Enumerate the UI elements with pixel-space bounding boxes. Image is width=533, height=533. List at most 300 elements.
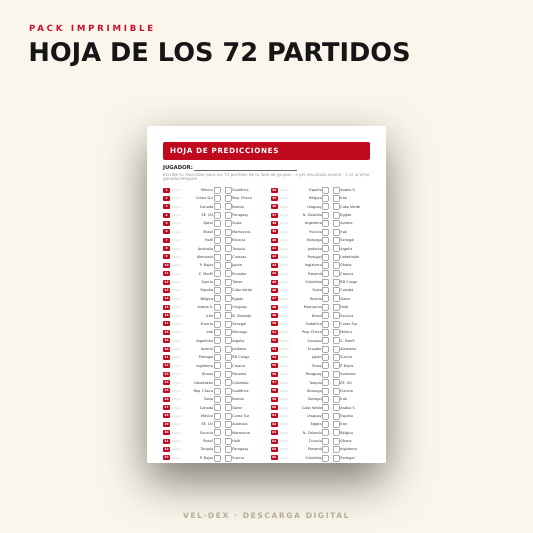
match 33 <box>163 455 244 462</box>
match 16: N. Zelanda <box>232 314 251 318</box>
match 6: - <box>222 230 223 234</box>
match 35: 35 <box>272 196 276 200</box>
match 11: 14 jun <box>172 272 181 276</box>
match 44: 22 jun <box>280 272 289 276</box>
match 31: Brasil <box>203 439 213 443</box>
match 17 <box>163 321 246 328</box>
match 21: 17 jun <box>172 355 181 359</box>
match 38 <box>147 219 386 227</box>
match 29: - <box>222 422 223 426</box>
match 20: Austria <box>201 347 213 351</box>
match 19: Argelia <box>232 339 244 343</box>
match 14: - <box>222 297 223 301</box>
match 53: Alemania <box>340 347 356 351</box>
match 36: 36 <box>272 204 276 208</box>
match 13: - <box>222 288 223 292</box>
match 4: Paraguay <box>232 213 248 217</box>
match 28: - <box>222 414 223 418</box>
match 45: - <box>330 280 331 284</box>
match 55: - <box>330 364 331 368</box>
match 3: Bosnia <box>232 205 244 209</box>
match 14: Egipto <box>232 297 243 301</box>
match 51: Rep. Checa <box>302 330 322 334</box>
match 8: 8 <box>165 246 168 250</box>
match 9: 14 jun <box>172 255 181 259</box>
match 56: 56 <box>272 372 276 376</box>
match 1: - <box>222 188 223 192</box>
match 8: 13 jun <box>172 247 181 251</box>
match 12: 14 jun <box>172 280 181 284</box>
match 54: Japón <box>312 355 322 359</box>
match 62: 62 <box>272 422 276 426</box>
match 1: México <box>201 188 213 192</box>
match 55: 25 jun <box>280 364 289 368</box>
match 53: - <box>330 347 331 351</box>
match 8: Australia <box>198 247 213 251</box>
match 5: 5 <box>165 221 168 225</box>
match 15: Arabia S. <box>198 305 213 309</box>
match 30: 30 <box>164 430 169 434</box>
match 39: Francia <box>309 230 322 234</box>
match 60: Arabia S. <box>340 406 356 410</box>
match 38: Argentina <box>305 221 322 225</box>
match 13: España <box>200 288 213 292</box>
match 45: 23 jun <box>280 280 289 284</box>
match 53: Ecuador <box>308 347 322 351</box>
match 27: Qatar <box>232 406 242 410</box>
match 12: 12 <box>164 280 169 284</box>
match 33: - <box>222 456 223 460</box>
match 41: 41 <box>272 246 276 250</box>
match 18: Irak <box>206 330 213 334</box>
match 60: 26 jun <box>280 406 289 410</box>
match 14: 15 jun <box>172 297 181 301</box>
match 17: Senegal <box>232 322 246 326</box>
match 26: Bosnia <box>232 397 244 401</box>
match 48: Marruecos <box>304 305 322 309</box>
match 7: Haití <box>205 238 213 242</box>
match 34: 34 <box>272 188 276 192</box>
match 43: Ghana <box>340 263 352 267</box>
match 39: 39 <box>272 229 276 233</box>
match 61: 61 <box>272 413 276 417</box>
match 25: Rep. Checa <box>194 389 213 393</box>
match 26: 26 <box>164 397 169 401</box>
match 14 <box>163 295 244 302</box>
match 1: 11 jun <box>172 188 181 192</box>
match 11: C. Marfil <box>199 272 213 276</box>
match 15: 15 jun <box>172 305 181 309</box>
match 64: 27 jun <box>280 439 289 443</box>
match 42: - <box>330 255 331 259</box>
match 16: Irán <box>206 314 213 318</box>
match 51: México <box>340 330 352 334</box>
match 22: 22 <box>164 363 169 367</box>
match 50: 24 jun <box>280 322 289 326</box>
match 34: - <box>330 188 331 192</box>
match 27: - <box>222 406 223 410</box>
match 15: 15 <box>164 305 169 309</box>
match 46: Suiza <box>312 288 322 292</box>
match 47: Bosnia <box>310 297 322 301</box>
match 14: 14 <box>164 296 169 300</box>
match 16 <box>163 312 251 318</box>
match 40: 40 <box>272 238 276 242</box>
match 66: 27 jun <box>280 456 289 460</box>
match 50: Corea Sur <box>340 322 357 326</box>
match 35: Irán <box>340 196 347 200</box>
left match column <box>163 187 252 462</box>
match 36: Cabo Verde <box>340 205 360 209</box>
match 29: 29 <box>164 422 169 426</box>
match 47: 47 <box>272 296 276 300</box>
match 27: 18 jun <box>172 406 181 410</box>
match 5 <box>163 220 242 226</box>
match 59: - <box>330 397 331 401</box>
match 22: - <box>222 364 223 368</box>
match 26: 18 jun <box>172 397 181 401</box>
match 55: P. Bajos <box>340 364 353 368</box>
match 52: 52 <box>272 338 276 342</box>
match 40: Senegal <box>340 238 354 242</box>
match 59 <box>147 395 386 403</box>
match 47 <box>147 295 386 303</box>
match 11: 11 <box>164 271 169 275</box>
match 21: Portugal <box>199 355 213 359</box>
match 30: Marruecos <box>232 431 250 435</box>
match 58: Francia <box>340 389 353 393</box>
match 37 <box>271 212 352 218</box>
match 48: Haití <box>340 305 348 309</box>
match 46: - <box>330 288 331 292</box>
match 62 <box>147 420 386 428</box>
match 32: 32 <box>164 447 169 451</box>
match 47: Qatar <box>340 297 350 301</box>
match 46: 46 <box>272 288 276 292</box>
match 43: 43 <box>272 263 276 267</box>
match 23 <box>163 371 246 378</box>
match 32: Turquía <box>200 447 213 451</box>
match 34: España <box>309 188 322 192</box>
match 50: 50 <box>272 321 276 325</box>
match 59: Senegal <box>308 397 322 401</box>
match 24 <box>163 379 248 386</box>
match 41 <box>147 245 386 253</box>
match 17: 16 jun <box>172 322 181 326</box>
match 56: Paraguay <box>306 372 322 376</box>
match 45: 45 <box>272 280 276 284</box>
match 65 <box>147 445 386 453</box>
match 66: - <box>330 456 331 460</box>
match 18 <box>163 329 247 336</box>
match 28: 18 jun <box>172 414 181 418</box>
match 16: 16 <box>164 313 169 317</box>
match 31: - <box>222 439 223 443</box>
match 17: - <box>222 322 223 326</box>
match 54: 25 jun <box>280 355 289 359</box>
match 57: 57 <box>272 380 276 384</box>
match 23: 23 <box>164 372 169 376</box>
match 43: 22 jun <box>280 263 289 267</box>
match 65: 27 jun <box>280 447 289 451</box>
match 29: 19 jun <box>172 422 181 426</box>
match 52: Curazao <box>308 339 322 343</box>
match 5: - <box>222 221 223 225</box>
match 29: Australia <box>232 422 248 426</box>
match 35 <box>271 195 347 202</box>
match 4: 12 jun <box>172 213 181 217</box>
match 44: - <box>330 272 331 276</box>
match 22: 17 jun <box>172 364 181 368</box>
match 35: - <box>330 196 331 200</box>
match 15: - <box>222 305 223 309</box>
match 57: 25 jun <box>280 380 289 384</box>
match 62: 26 jun <box>280 422 289 426</box>
match 10: - <box>222 263 223 267</box>
match 44: Croacia <box>340 272 353 276</box>
match 3: Canadá <box>200 205 213 209</box>
match 42 <box>147 253 386 261</box>
match 57: EE. UU <box>340 380 352 384</box>
match 38: 21 jun <box>280 221 289 225</box>
match 54 <box>147 353 386 361</box>
match 59: 59 <box>272 397 276 401</box>
match 13: 13 <box>164 288 169 292</box>
match 49: Brasil <box>312 314 322 318</box>
match 28 <box>163 413 250 420</box>
match 63: Bélgica <box>340 431 353 435</box>
match 63: 26 jun <box>280 431 289 435</box>
match 53: 53 <box>272 347 276 351</box>
match 16: - <box>222 314 223 318</box>
match 61: - <box>330 414 331 418</box>
match 43: - <box>330 263 331 267</box>
match 20 <box>163 346 246 352</box>
match 64: 64 <box>272 439 276 443</box>
match 39: Irak <box>340 230 347 234</box>
match 22: Croacia <box>232 364 245 368</box>
match 43 <box>147 261 386 269</box>
match 45: Colombia <box>306 280 322 284</box>
match 57 <box>147 378 386 386</box>
match 51: 51 <box>272 330 276 334</box>
match 40: Noruega <box>307 238 322 242</box>
match 2: Rep. Checa <box>232 196 252 200</box>
match 19: 16 jun <box>172 339 181 343</box>
match 56: - <box>330 372 331 376</box>
match 41: - <box>330 247 331 251</box>
match 17: Francia <box>201 322 213 326</box>
match 27: 27 <box>164 405 169 409</box>
match 12: Suecia <box>202 280 213 284</box>
match 61: 26 jun <box>280 414 289 418</box>
match 62: Irán <box>340 422 347 426</box>
match 6: Brasil <box>203 230 213 234</box>
match 24: Uzbekistán <box>194 380 213 384</box>
match 4: EE. UU <box>201 213 213 217</box>
match 45 <box>147 278 386 286</box>
match 46: Canadá <box>340 288 353 292</box>
match 9: Alemania <box>197 255 213 259</box>
match 8: - <box>222 247 223 251</box>
match 59: Irak <box>340 397 347 401</box>
match 20: Jordania <box>232 347 246 351</box>
match 4: 4 <box>165 213 168 217</box>
match 15: Uruguay <box>232 305 247 309</box>
match 65: Panamá <box>308 447 322 451</box>
match 9: Curazao <box>232 255 246 259</box>
match 11: Ecuador <box>232 272 246 276</box>
match 51: - <box>330 330 331 334</box>
match 27 <box>163 404 242 410</box>
match 26 <box>163 396 244 402</box>
match 26: Suiza <box>204 397 213 401</box>
match 5: Qatar <box>203 221 213 225</box>
match 61 <box>147 412 386 420</box>
match 13: 15 jun <box>172 288 181 292</box>
match 5: Suiza <box>232 221 242 225</box>
match 30 <box>163 429 250 436</box>
match 20: - <box>222 347 223 351</box>
match 52: 25 jun <box>280 339 289 343</box>
match 47: - <box>330 297 331 301</box>
match 12 <box>163 279 242 286</box>
match 37: - <box>330 213 331 217</box>
match 48 <box>147 303 386 311</box>
match 6: 13 jun <box>172 230 181 234</box>
match 36: Uruguay <box>307 205 322 209</box>
match 39 <box>147 228 386 236</box>
match 10: Japón <box>232 263 242 267</box>
match 33: 33 <box>164 455 169 459</box>
match 58: - <box>330 389 331 393</box>
match 52: C. Marfil <box>340 339 354 343</box>
match 52: - <box>330 339 331 343</box>
match 56: Australia <box>340 372 356 376</box>
match 25: 18 jun <box>172 389 181 393</box>
match 45: RD Congo <box>340 280 357 284</box>
match 2 <box>163 195 252 202</box>
match 1: 1 <box>165 188 168 192</box>
match 1 <box>163 187 249 194</box>
match 16: 15 jun <box>172 314 181 318</box>
match 21 <box>163 354 250 360</box>
match 33: Suecia <box>232 456 244 460</box>
sheet header bar <box>163 142 370 160</box>
match 34: 20 jun <box>280 188 289 192</box>
match 22: Inglaterra <box>196 364 213 368</box>
match 64: - <box>330 439 331 443</box>
match 60 <box>147 404 386 412</box>
match 49: - <box>330 314 331 318</box>
match 21: RD Congo <box>232 355 249 359</box>
match 35: 20 jun <box>280 196 289 200</box>
match 11 <box>163 270 246 276</box>
match 49 <box>147 312 386 320</box>
match 9 <box>163 254 246 260</box>
match 53: 25 jun <box>280 347 289 351</box>
match 58: 26 jun <box>280 389 289 393</box>
match 6 <box>163 229 250 236</box>
match 39: 21 jun <box>280 230 289 234</box>
match 31 <box>163 438 240 444</box>
match 60: 60 <box>272 405 276 409</box>
match 23: Ghana <box>202 372 213 376</box>
match 29 <box>163 421 248 428</box>
panel: prediction sheet <box>147 126 386 463</box>
match 25 <box>163 388 249 394</box>
match 7: Escocia <box>232 238 245 242</box>
match 63: 63 <box>272 430 276 434</box>
match 17: 17 <box>164 321 169 325</box>
match 44: 44 <box>272 271 276 275</box>
match 24: 17 jun <box>172 380 181 384</box>
match 48: 24 jun <box>280 305 289 309</box>
sheet header bar: HOJA DE PREDICCIONES <box>170 146 279 155</box>
match 59: 26 jun <box>280 397 289 401</box>
match 6: Marruecos <box>232 230 250 234</box>
match 23: 17 jun <box>172 372 181 376</box>
match 63: N. Zelanda <box>303 431 322 435</box>
title: HOJA DE LOS 72 PARTIDOS <box>28 38 411 68</box>
match 31: Haití <box>232 439 240 443</box>
match 6: 6 <box>165 229 168 233</box>
match 44: Panamá <box>308 272 322 276</box>
match 50: Sudáfrica <box>305 322 322 326</box>
match 42: 42 <box>272 254 276 258</box>
match 7: 7 <box>165 238 168 242</box>
right match column <box>271 187 360 462</box>
match 15 <box>163 304 247 310</box>
match 23: - <box>222 372 223 376</box>
match 44 <box>147 270 386 278</box>
match 19: - <box>222 339 223 343</box>
match 40: - <box>330 238 331 242</box>
match 19: 19 <box>164 338 169 342</box>
match 3: 3 <box>165 204 168 208</box>
match 33: P. Bajos <box>200 456 213 460</box>
match 38: 38 <box>272 221 276 225</box>
match 37: Egipto <box>340 213 351 217</box>
match 2: 11 jun <box>172 196 181 200</box>
match 25: Sudáfrica <box>232 389 249 393</box>
match 28: 28 <box>164 413 169 417</box>
match 66 <box>147 454 386 462</box>
match 54: - <box>330 355 331 359</box>
match 42: 22 jun <box>280 255 289 259</box>
match 65: - <box>330 447 331 451</box>
match 58: Noruega <box>307 389 322 393</box>
match 49: 24 jun <box>280 314 289 318</box>
match 55: Túnez <box>312 364 322 368</box>
match 42: Portugal <box>307 255 322 259</box>
match 49: Escocia <box>340 314 353 318</box>
match 66: Portugal <box>340 456 355 460</box>
match 24: Colombia <box>232 380 248 384</box>
match 11: - <box>222 272 223 276</box>
match 23: Panamá <box>232 372 246 376</box>
match 37: 21 jun <box>280 213 289 217</box>
match 43: Inglaterra <box>305 263 322 267</box>
match 66: 66 <box>272 455 276 459</box>
match 30: 19 jun <box>172 431 181 435</box>
match 37: N. Zelanda <box>303 213 322 217</box>
match 57: - <box>330 380 331 384</box>
match 18: - <box>222 330 223 334</box>
match 46 <box>147 286 386 294</box>
match 48: 48 <box>272 305 276 309</box>
match 51 <box>147 328 386 336</box>
